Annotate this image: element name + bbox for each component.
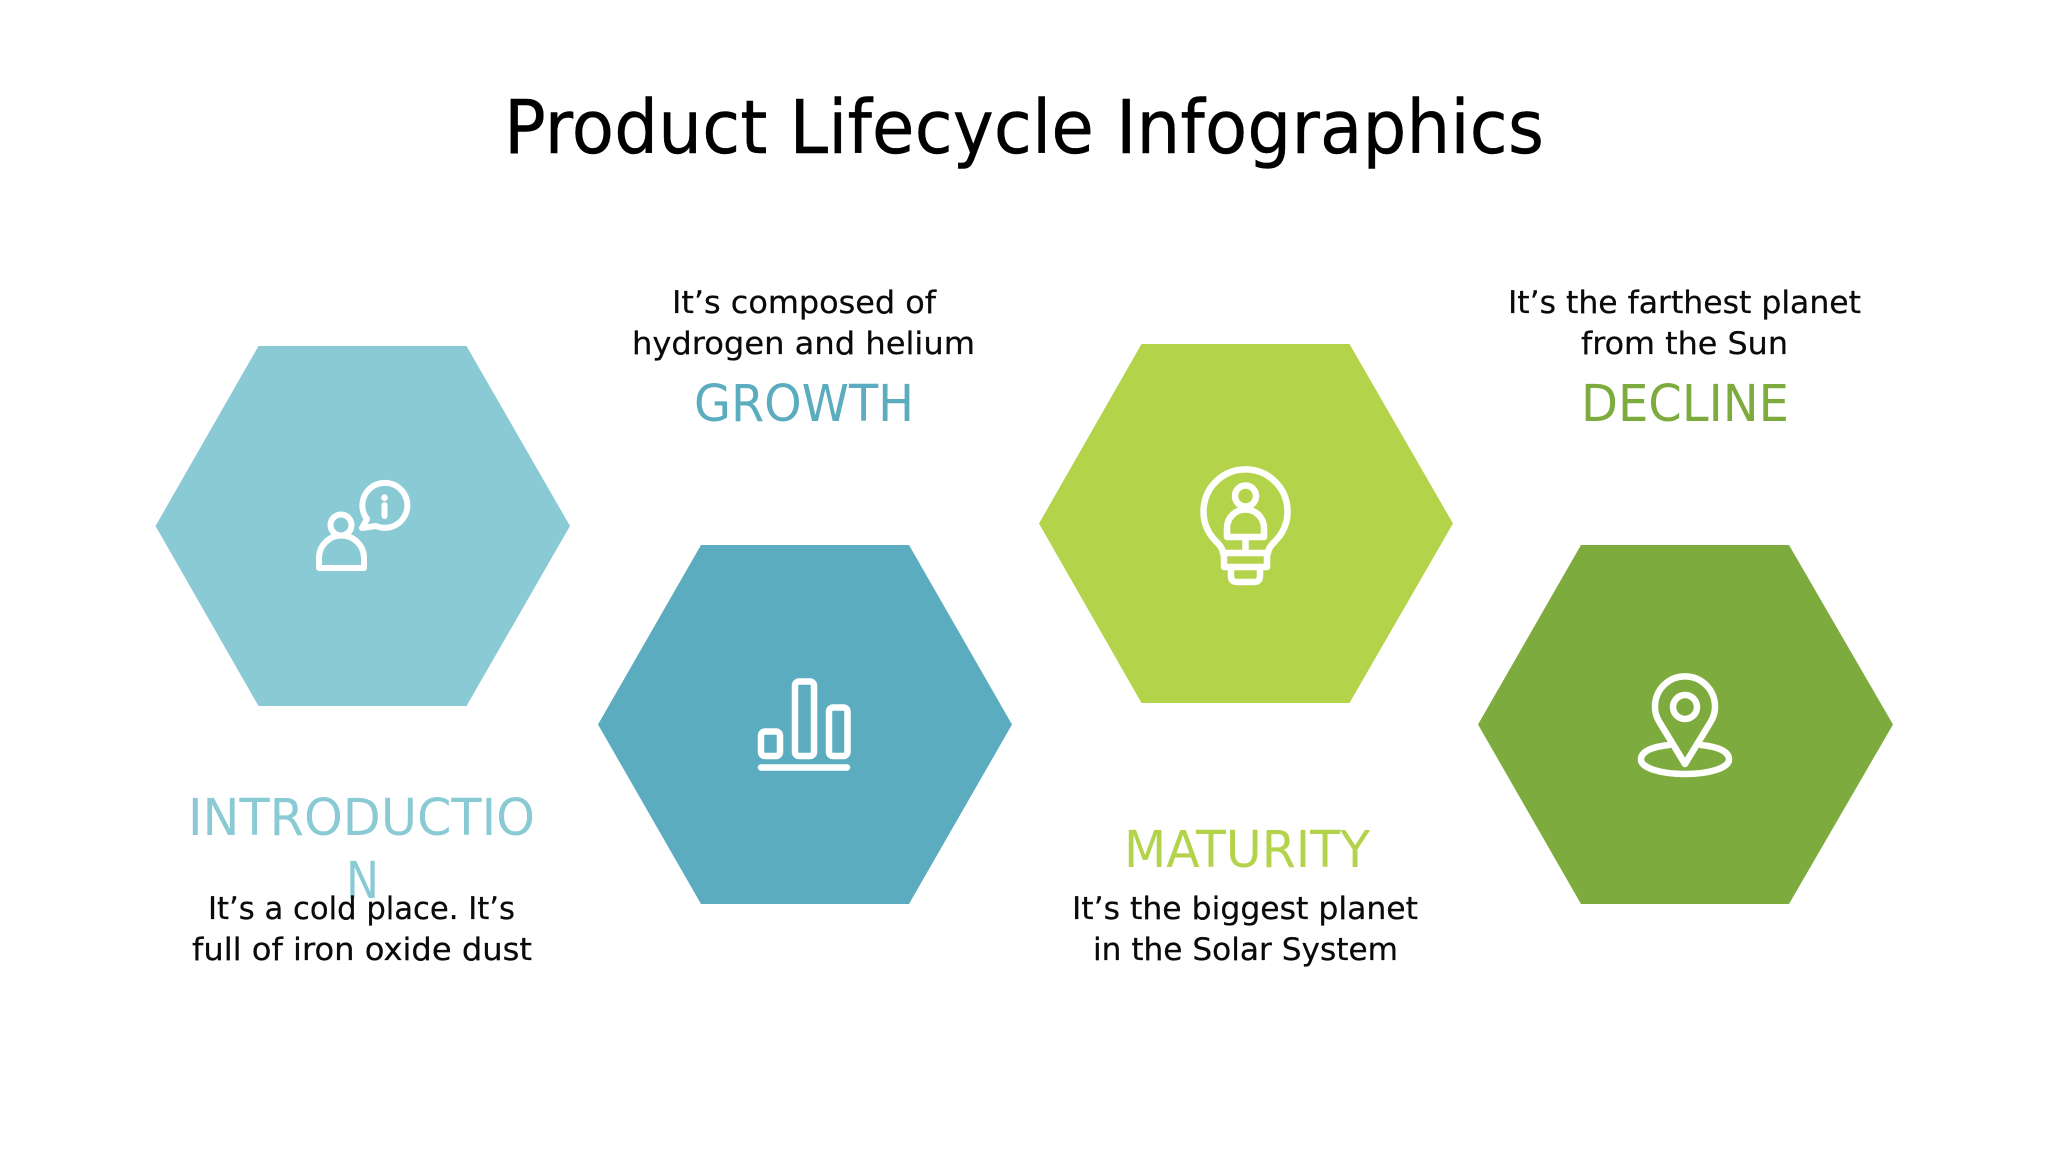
text: growth description bbox=[632, 285, 975, 362]
panel: maturity bbox=[1039, 344, 1453, 968]
icon: light bulb with person bbox=[1204, 469, 1288, 582]
hexagon: growth bbox=[598, 545, 1012, 904]
hexagon: decline bbox=[1478, 545, 1893, 904]
hexagon: maturity bbox=[1039, 344, 1453, 703]
icon: bar chart bbox=[761, 682, 848, 768]
text: maturity description: It’s the biggest planet bbox=[1072, 891, 1418, 927]
text: growth description: hydrogen and helium bbox=[632, 326, 975, 362]
text: decline description bbox=[1508, 285, 1861, 362]
text: maturity description bbox=[1072, 891, 1418, 968]
heading: decline: DECLINE bbox=[1581, 375, 1789, 434]
text: introduction description bbox=[192, 891, 532, 968]
heading: introduction: INTRODUCTIO bbox=[188, 789, 535, 848]
icon: location pin bbox=[1641, 676, 1729, 774]
text: decline description: It’s the farthest planet bbox=[1508, 285, 1861, 321]
text: maturity description: in the Solar System bbox=[1093, 932, 1398, 968]
hexagon: introduction bbox=[156, 346, 570, 706]
title: Product Lifecycle Infographics bbox=[504, 85, 1544, 171]
heading: maturity: MATURITY bbox=[1124, 821, 1371, 880]
heading: introduction: N bbox=[346, 852, 379, 911]
text: introduction description: It’s a cold place. It’s bbox=[208, 891, 515, 927]
panel: growth bbox=[598, 285, 1012, 904]
panel: introduction bbox=[156, 346, 570, 968]
text: decline description: from the Sun bbox=[1581, 326, 1788, 362]
heading: introduction bbox=[188, 789, 535, 911]
icon: person with info speech bubble bbox=[319, 483, 407, 568]
panel: decline bbox=[1478, 285, 1893, 904]
text: introduction description: full of iron oxide dust bbox=[192, 932, 532, 968]
heading: growth: GROWTH bbox=[694, 375, 914, 434]
text: growth description: It’s composed of bbox=[672, 285, 937, 321]
